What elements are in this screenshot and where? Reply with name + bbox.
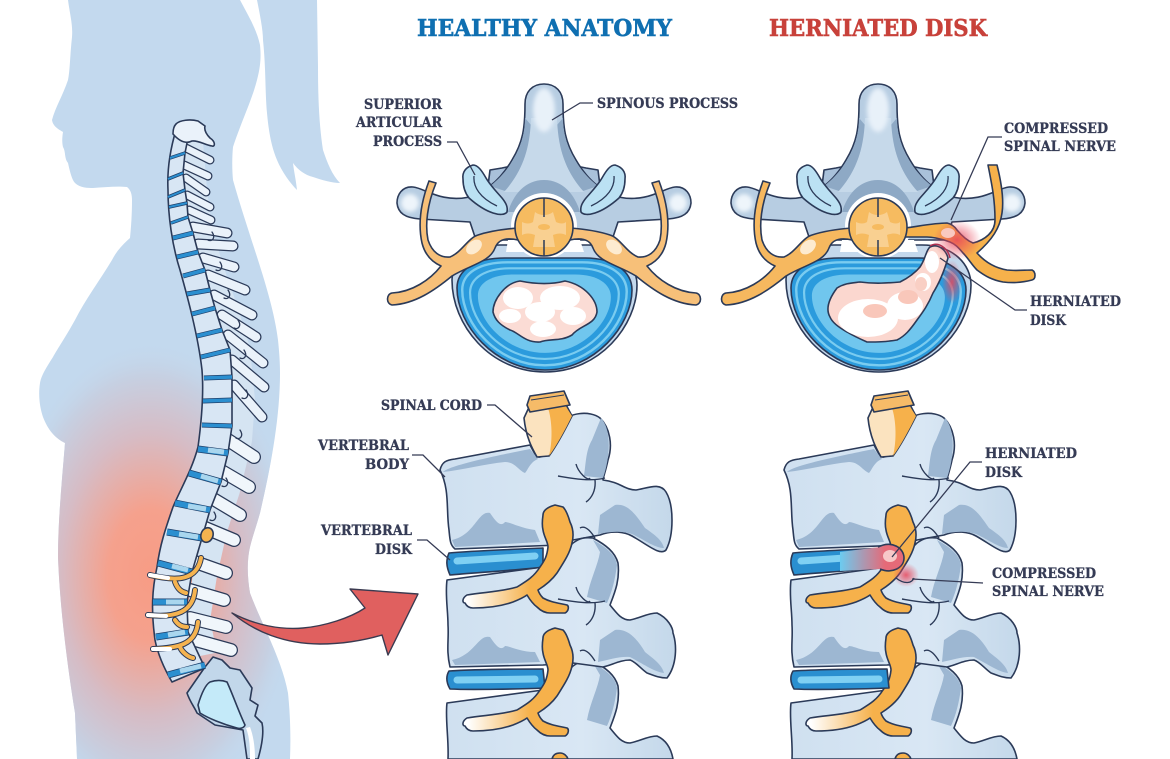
label: superior articular process: PROCESS [373,134,442,150]
herniated spinal cord stub [868,391,916,457]
label: compressed spinal nerve side: COMPRESSED [992,566,1096,582]
label: vertebral disk: VERTEBRAL [320,523,412,539]
label: spinal cord: SPINAL CORD [381,398,482,414]
top cervical vertebra [173,120,214,146]
label: vertebral disk: DISK [375,542,413,558]
label: vertebral body [317,438,409,473]
heading: healthy anatomy: HEALTHY ANATOMY [417,15,673,42]
disks with herniation bulge [791,544,919,689]
label: herniated disk side: DISK [985,465,1023,481]
panel: healthy side view vertebrae [440,391,675,759]
red arrow [232,589,418,655]
herniated left nerve [722,181,852,305]
heading: herniated disk: HERNIATED DISK [769,15,988,42]
label: superior articular process [355,97,443,150]
spine side view [148,120,264,759]
spinal disks on the column [153,153,232,675]
vertebral bodies [153,128,232,682]
label: herniated disk top: HERNIATED [1030,294,1121,310]
compressed right nerve [905,165,1035,283]
label: vertebral body: VERTEBRAL [317,438,409,454]
woman silhouette with lower back pain glow [39,0,340,759]
label: compressed spinal nerve top: SPINAL NERVE [1004,139,1116,155]
healthy disks [447,548,543,575]
label: herniated disk side: HERNIATED [985,446,1077,462]
healthy nerve roots [463,505,573,613]
spine nerve roots at the lumbar level [148,558,201,658]
label: herniated disk top: DISK [1030,313,1067,329]
label: spinous process: SPINOUS PROCESS [597,96,738,112]
label: herniated disk side [985,446,1077,481]
label: superior articular process: SUPERIOR [364,97,443,113]
spinous processes [184,148,264,650]
panel: herniated side view vertebrae [784,391,1019,759]
labels and leader lines [317,96,1121,600]
label: compressed spinal nerve top [1004,121,1116,155]
panel: herniated top view vertebra [722,84,1035,372]
label: herniated disk top [1030,294,1121,329]
healthy spinal cord stub [524,391,572,457]
label: vertebral disk [320,523,413,558]
label: vertebral body: BODY [365,457,409,473]
panel: healthy top view vertebra [388,84,700,372]
ponytail [257,0,340,190]
inflammation glow [930,220,981,304]
healthy spinal nerves [388,181,700,305]
label: compressed spinal nerve side [992,566,1104,600]
herniated nucleus pushing through the disk [828,246,948,342]
label: compressed spinal nerve top: COMPRESSED [1004,121,1108,137]
sacrum and tailbone [187,657,263,759]
label: compressed spinal nerve side: SPINAL NERVE [992,584,1104,600]
label: superior articular process: ARTICULAR [355,115,443,131]
nerve roots [806,505,916,613]
orange spot on spine [199,526,215,544]
healthy disk nucleus [493,281,597,342]
